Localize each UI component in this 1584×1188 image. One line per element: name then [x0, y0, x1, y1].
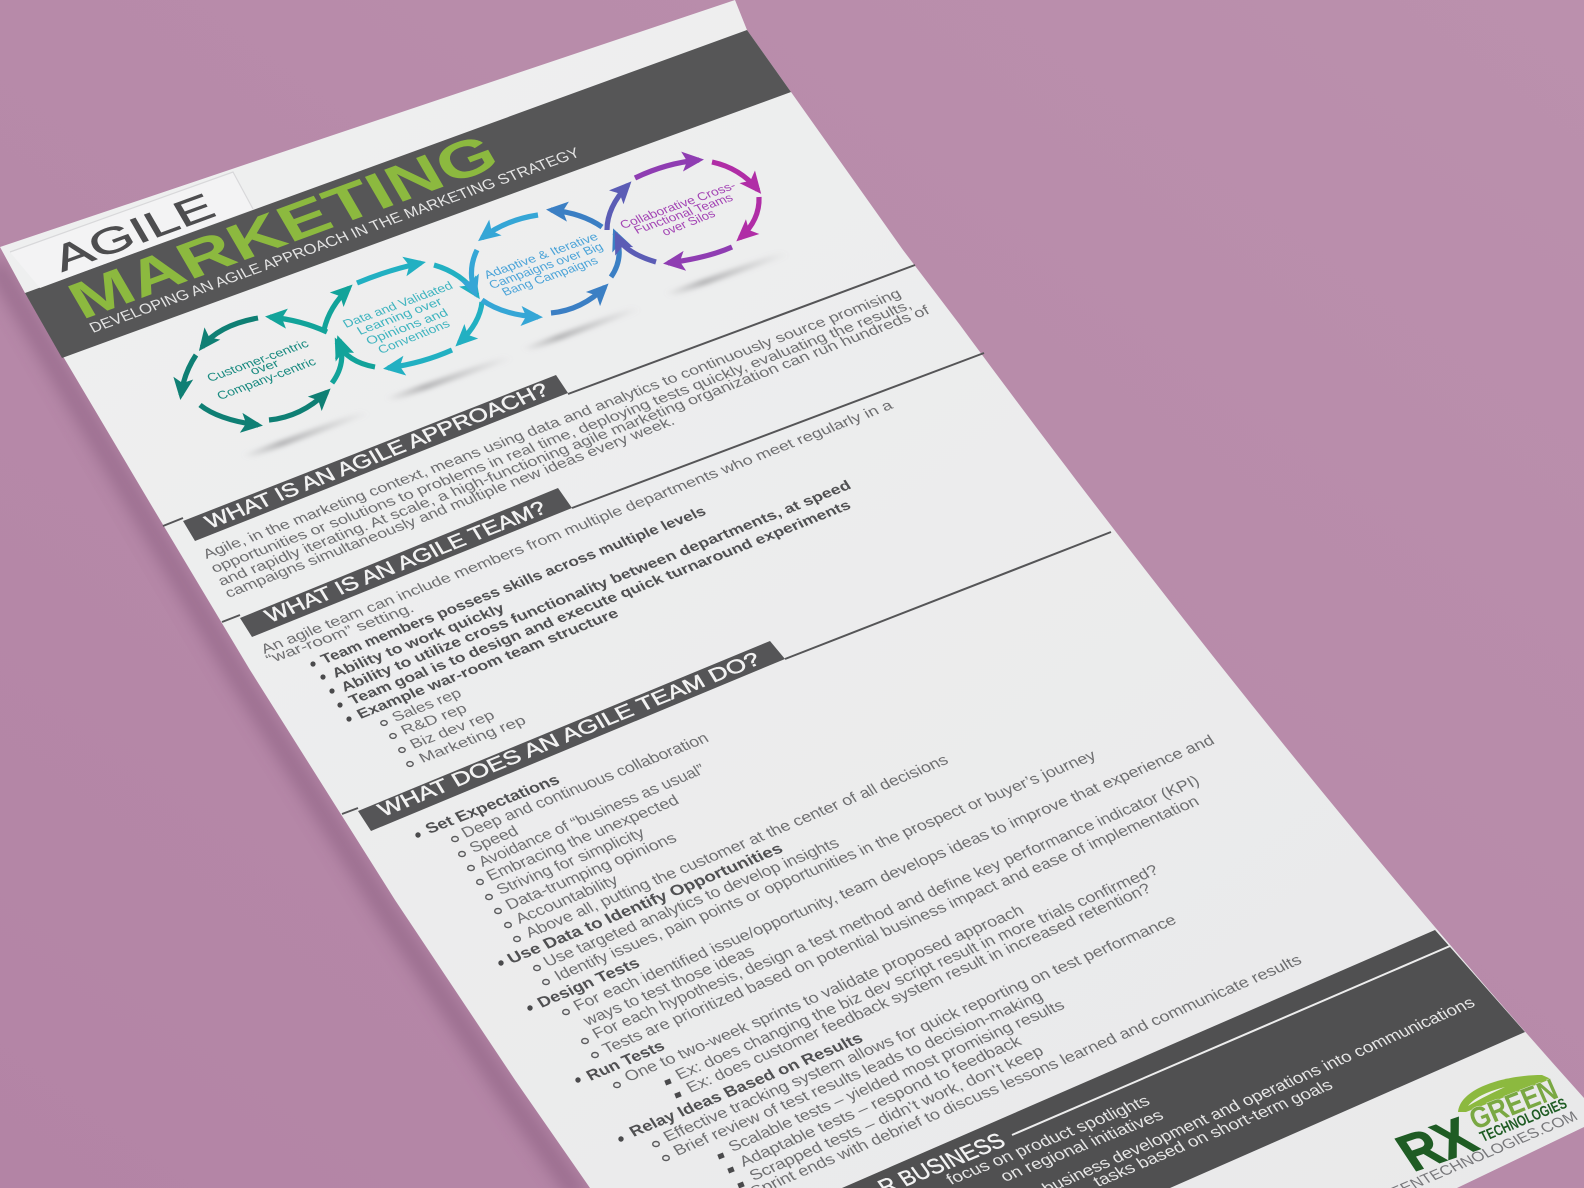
subtitle: DEVELOPING AN AGILE APPROACH IN THE MARKETING STRATEGY [86, 145, 583, 336]
diagram shadows [245, 253, 786, 457]
list detail text: Deep and continuous collaboration [458, 730, 712, 841]
list detail text: For each identified issue/opportunity, team develops ideas to improve that experience and [570, 732, 1218, 1014]
list detail text: Embracing the unexpected [483, 792, 682, 884]
panel: what does an agile team do [358, 641, 1305, 1188]
arrows [471, 215, 538, 317]
bold list items: Use Data to Identify Opportunities [504, 840, 787, 967]
list detail text: Scalable tests – yielded most promising results [725, 997, 1068, 1155]
sub bullets [381, 721, 413, 766]
sub list: R&D rep [398, 701, 470, 738]
tab outline [10, 172, 253, 252]
bullet list: Example war-room team structure [354, 606, 622, 722]
band [842, 930, 1525, 1188]
list detail text: Scrapped tests – didn’t work, don’t keep [746, 1043, 1047, 1184]
sub list: Biz dev rep [407, 708, 498, 752]
list detail text: Striving for simplicity [493, 825, 648, 898]
logo GREEN: GREEN [1465, 1073, 1563, 1136]
list detail text: Data-trumping opinions [502, 830, 680, 913]
banner band [25, 30, 791, 358]
band rule [1012, 946, 1450, 1135]
loop 4: cross-functional teams [607, 160, 759, 263]
loop label: Collaborative Cross- [617, 179, 738, 232]
sub list [389, 686, 529, 766]
sub list: Sales rep [389, 686, 465, 725]
loop label: Conventions [375, 317, 453, 357]
square bullets [664, 1079, 745, 1188]
arrows right [551, 210, 619, 313]
intro text: “war-room” setting. [263, 601, 417, 667]
loop label: over [247, 357, 282, 378]
agile tab [10, 172, 253, 288]
list detail text: Effective tracking system allows for quick reporting on test performance [660, 912, 1180, 1145]
loop 3: adaptive campaigns [471, 210, 619, 317]
logo RX: RX [1385, 1106, 1488, 1182]
bullet list [318, 478, 854, 722]
arrows purple [635, 160, 732, 263]
bold list items: Run Tests [583, 1038, 669, 1084]
title: AGILE: AGILE [45, 187, 222, 280]
heading: WHAT IS AN AGILE APPROACH? [201, 379, 553, 533]
logo: RX Green Technologies [1345, 1073, 1581, 1188]
title: MARKETING: MARKETING [58, 124, 508, 330]
footer lines: on regional initiatives [997, 1107, 1167, 1185]
loop label [204, 337, 319, 403]
loop label [340, 279, 455, 357]
panel: what is an agile approach [183, 286, 933, 601]
loop 1: customer-centric [181, 318, 327, 425]
loop label: Adaptive & Iterative [481, 230, 601, 282]
loop label: Functional Teams [631, 191, 736, 237]
list detail text: Ex: does changing the biz dev script result in more trials confirmed? [672, 862, 1162, 1083]
leaf highlight [1468, 1087, 1505, 1106]
intro text [258, 398, 896, 667]
chart: agile loop diagram [181, 160, 759, 425]
body text: opportunities or solutions to problems in real time, deploying tests quickly, evaluating the results, [208, 298, 915, 576]
heading bar [240, 488, 572, 637]
body text: campaigns simultaneously and multiple new ideas every week. [222, 414, 678, 601]
panel: footer band [842, 930, 1525, 1188]
panel: what is an agile team [240, 398, 896, 766]
arrows [270, 288, 375, 383]
list detail text: Accountability [512, 872, 622, 927]
heading bar [183, 375, 568, 541]
loop label [481, 230, 606, 299]
list detail text: Brief review of test results leads to decision-making [670, 988, 1046, 1159]
sub list: Marketing rep [416, 713, 529, 766]
bold list items: Set Expectations [422, 772, 563, 837]
logo leaf [1458, 1075, 1551, 1112]
bold list items [422, 772, 867, 1140]
bullet list: Team members possess skills across multiple levels [318, 504, 709, 667]
list detail text: Ex: does customer feedback system result in increased retention? [683, 880, 1155, 1096]
list detail text: Avoidance of “business as usual” [475, 761, 709, 870]
list detail text: Above all, putting the customer at the center of all decisions [522, 752, 952, 941]
bold list items: Relay Ideas Based on Results [626, 1030, 867, 1140]
list detail text: One to two-week sprints to validate proposed approach [621, 902, 1027, 1085]
loop label: Company-centric [214, 355, 319, 403]
body text [200, 286, 933, 601]
loop label: Customer-centric [204, 337, 311, 385]
loop label: Opinions and [363, 306, 451, 348]
loop label: Learning over [354, 295, 445, 338]
loop label: Bang Campaigns [499, 254, 601, 299]
list detail text: ways to test those ideas [579, 943, 758, 1030]
list detail text: Tests are prioritized based on potential business impact and ease of implementation [599, 793, 1202, 1057]
heading: WHAT DOES AN AGILE TEAM DO? [374, 649, 764, 821]
paper shadow [0, 262, 580, 1188]
arrows magenta [712, 162, 759, 238]
hollow bullets [452, 836, 669, 1160]
bullet list: Ability to utilize cross functionality between departments, at speed [338, 478, 854, 695]
arrows [607, 185, 656, 262]
list detail text: For each hypothesis, design a test method and define key performance indicator (KPI) [589, 773, 1203, 1042]
panel: title banner [10, 30, 791, 358]
loop label: over Silos [659, 207, 718, 239]
heading bar [358, 641, 785, 831]
loop 2: data and validated learning [270, 263, 482, 383]
arrows [181, 318, 327, 425]
list detail text: Speed [466, 823, 522, 856]
footer lines: focus on product spotlights [943, 1092, 1154, 1188]
loop label: Data and Validated [340, 279, 455, 331]
list detail text [458, 730, 1305, 1188]
bullet list: Ability to work quickly [329, 601, 508, 681]
bullet list: Team goal is to design and execute quick turnaround experiments [346, 498, 854, 708]
body text: Agile, in the marketing context, means using data and analytics to continuously source promising [200, 286, 904, 562]
bold list items: Design Tests [534, 955, 644, 1011]
footer lines: tasks based on short-term goals [1090, 1077, 1336, 1188]
loop label: Campaigns over Big [486, 240, 606, 292]
list detail text: Use targeted analytics to develop insights [540, 835, 843, 970]
intro text: An agile team can include members from multiple departments who meet regularly in a [258, 398, 896, 657]
list detail text: Identify issues, pain points or opportunities in the prospect or buyer’s journey [551, 747, 1100, 984]
bullet dots [310, 661, 352, 722]
arrows upper [357, 263, 482, 368]
list detail text: Adaptable tests – respond to feedback [736, 1033, 1025, 1170]
body text: and rapidly iterating. At scale, a high-functioning agile marketing organization can run hundreds of [215, 303, 933, 589]
heading: WHAT IS AN AGILE TEAM? [261, 498, 550, 627]
bullet dots [415, 832, 624, 1142]
